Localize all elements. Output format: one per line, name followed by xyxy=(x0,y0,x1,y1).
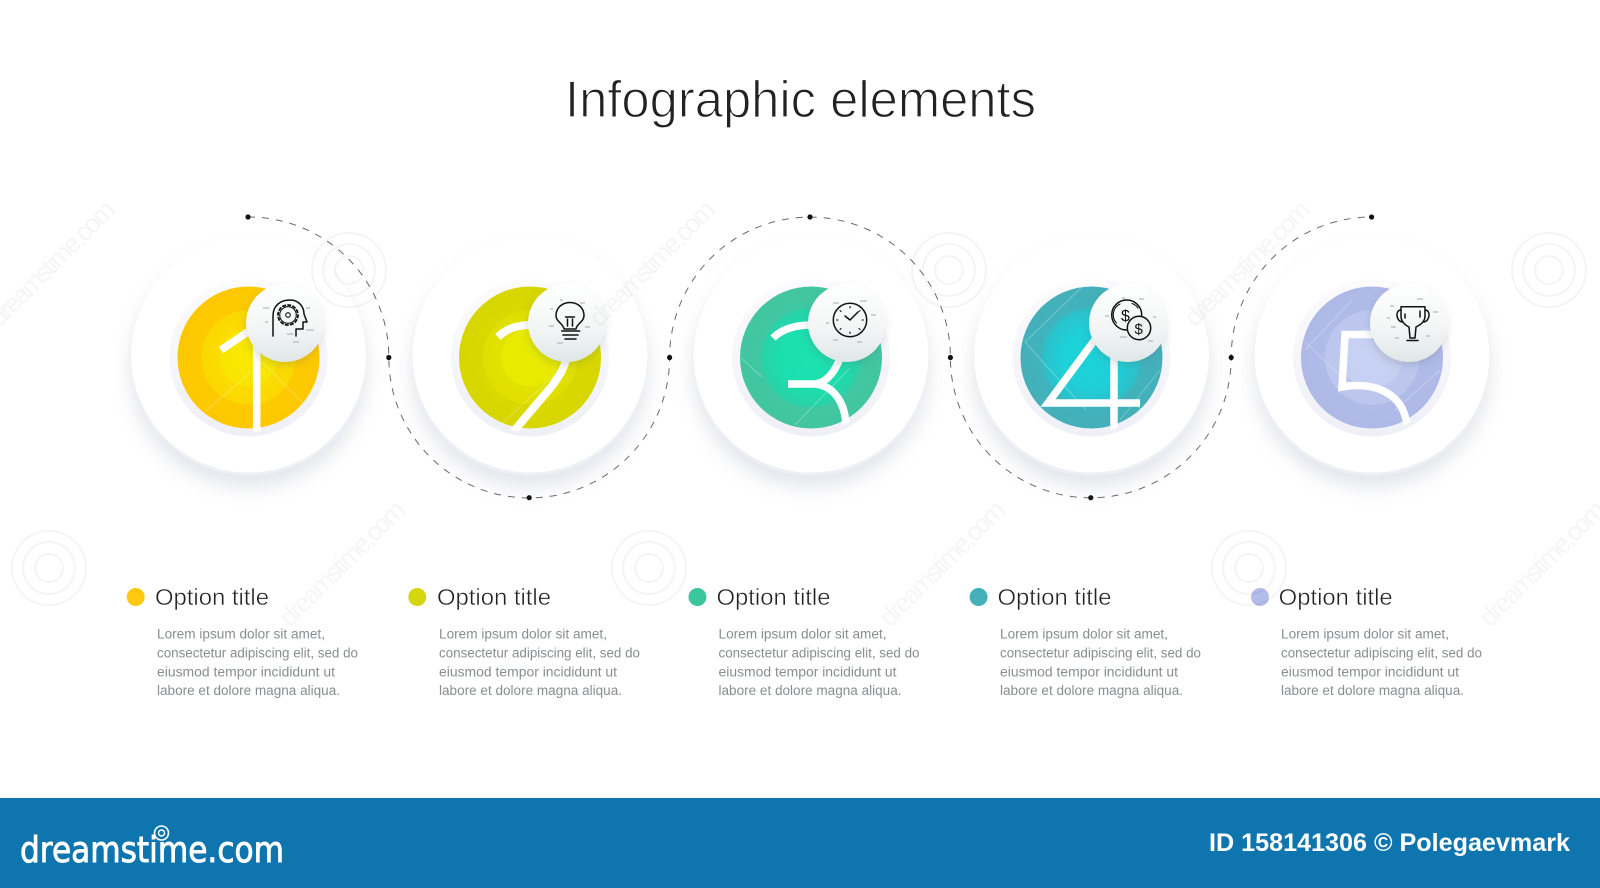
image id and credit: ID 158141306 © Polegaevmark xyxy=(1209,829,1570,857)
option 5 text block: Option title xyxy=(1279,584,1393,610)
option 3 text block: consectetur adipiscing elit, sed do xyxy=(718,646,920,660)
dreamstime logo: dreamstime.com xyxy=(20,830,284,871)
step 4 circle xyxy=(973,238,1210,476)
option 2 text block: Lorem ipsum dolor sit amet, xyxy=(439,626,607,642)
option 1 text block: labore et dolore magna aliqua. xyxy=(157,683,340,698)
number 3 xyxy=(773,325,846,436)
option 2 bullet xyxy=(408,588,426,606)
small icon disc: head with gear xyxy=(246,284,324,362)
option 1 bullet xyxy=(127,588,145,606)
option 5 text block: Lorem ipsum dolor sit amet, xyxy=(1281,626,1449,642)
small icon disc: clock xyxy=(808,284,886,362)
number 2 xyxy=(498,325,567,438)
small icon disc: trophy xyxy=(1370,284,1448,362)
small icon disc: dollar coins: $ xyxy=(1121,308,1130,325)
option 1 text block: eiusmod tempor incididunt ut xyxy=(157,664,335,679)
step 3 circle xyxy=(692,238,930,476)
option 5 text block: consectetur adipiscing elit, sed do xyxy=(1281,646,1482,660)
option 4 text block: Option title xyxy=(998,584,1112,610)
text: dreamstime.com xyxy=(583,194,721,332)
small icon disc: dollar coins xyxy=(1089,284,1167,362)
option 4 text block: Lorem ipsum dolor sit amet, xyxy=(1000,626,1168,642)
option 2 text block: eiusmod tempor incididunt ut xyxy=(439,664,617,679)
option 5 text block: labore et dolore magna aliqua. xyxy=(1281,683,1464,698)
option 4 text block: labore et dolore magna aliqua. xyxy=(1000,683,1183,698)
option 4 text block xyxy=(970,584,1201,698)
option 2 text block: consectetur adipiscing elit, sed do xyxy=(439,646,640,660)
option 2 text block: labore et dolore magna aliqua. xyxy=(439,683,622,698)
option 2 text block: Option title xyxy=(437,584,551,610)
title: Infographic elements xyxy=(565,71,1036,129)
option 5 text block: eiusmod tempor incididunt ut xyxy=(1281,664,1459,679)
option 3 text block xyxy=(688,584,920,698)
option 5 bullet xyxy=(1251,588,1269,606)
small icon disc: dollar coins: $ xyxy=(1134,321,1144,338)
number 4 xyxy=(1040,338,1140,430)
number 5 xyxy=(1342,334,1407,436)
option 3 text block: Option title xyxy=(716,584,830,610)
footer bar xyxy=(0,798,1600,888)
option 4 text block: consectetur adipiscing elit, sed do xyxy=(1000,646,1201,660)
step 1 circle xyxy=(130,238,367,476)
step 5 circle xyxy=(1254,238,1490,476)
option 1 text block: Lorem ipsum dolor sit amet, xyxy=(157,626,325,642)
option 1 text block xyxy=(127,584,358,698)
option 3 text block: labore et dolore magna aliqua. xyxy=(718,683,902,698)
step 2 circle xyxy=(412,238,648,476)
option 5 text block xyxy=(1251,584,1482,698)
text: dreamstime.com xyxy=(273,494,411,632)
option 2 text block xyxy=(408,584,640,698)
dashed connector path xyxy=(245,214,1374,500)
small icon disc: light bulb xyxy=(528,284,606,362)
option 4 bullet xyxy=(970,588,988,606)
text: dreamstime.com xyxy=(1178,194,1316,332)
option 3 bullet xyxy=(688,588,706,606)
option 1 text block: consectetur adipiscing elit, sed do xyxy=(157,646,358,660)
option 4 text block: eiusmod tempor incididunt ut xyxy=(1000,664,1178,679)
number 1 xyxy=(221,322,258,440)
option 3 text block: Lorem ipsum dolor sit amet, xyxy=(718,626,886,642)
option 1 text block: Option title xyxy=(155,584,269,610)
option 3 text block: eiusmod tempor incididunt ut xyxy=(718,664,897,679)
text: dreamstime.com xyxy=(873,494,1011,632)
